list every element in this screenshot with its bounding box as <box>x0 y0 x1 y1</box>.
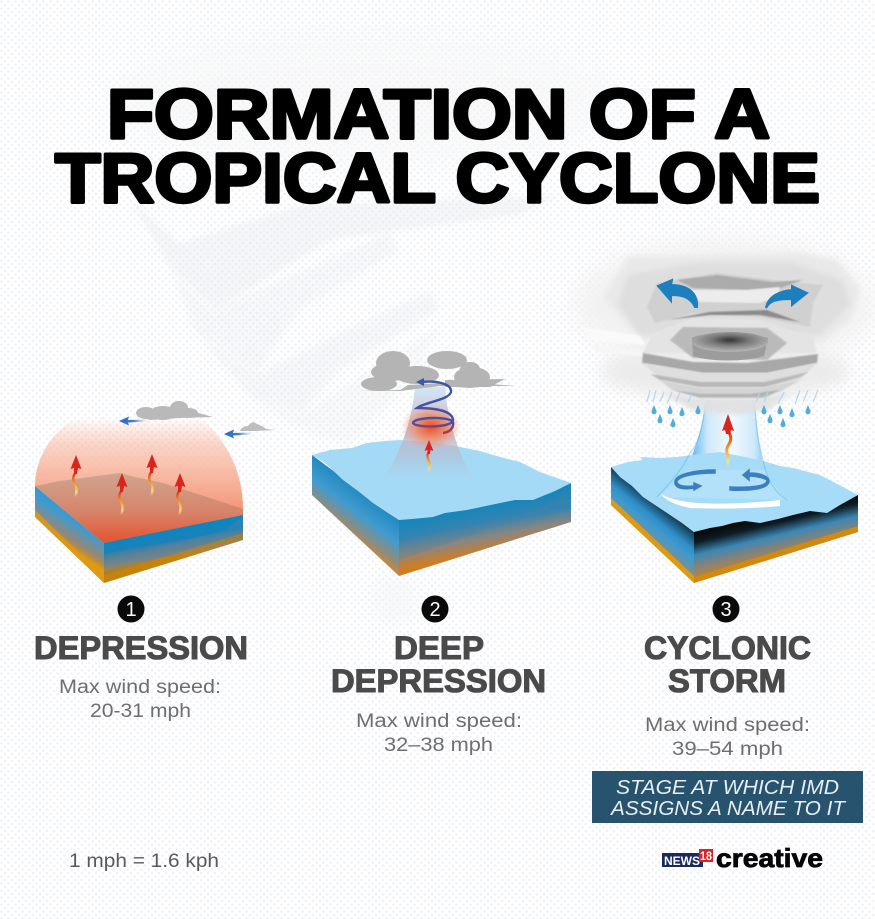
logo: News18 Creative: 18 <box>700 851 713 863</box>
wind speed: depression: Max wind speed: <box>59 677 221 698</box>
white swirl <box>661 494 780 509</box>
stage 2 text <box>331 596 546 756</box>
stage 3 illustration: cyclonic storm <box>575 240 875 583</box>
number badge 2 <box>422 596 448 622</box>
rising air arrow <box>424 440 434 472</box>
ocean block 1 <box>35 486 243 583</box>
heading: cyclonic storm: CYCLONIC <box>644 630 811 666</box>
number badge 1 <box>118 596 144 622</box>
wind speed: depression: 20-31 mph <box>90 701 191 722</box>
heading: deep depression <box>331 630 546 699</box>
wind speed: depression <box>59 677 221 722</box>
stage 3 text <box>644 596 811 760</box>
number badge 2: 2 <box>429 599 441 621</box>
wind speed: cyclonic storm <box>645 715 810 760</box>
cloud large <box>136 401 213 420</box>
stage 1 illustration: depression <box>35 401 275 583</box>
heading: cyclonic storm <box>644 630 811 699</box>
wind speed: deep depression: Max wind speed: <box>356 711 522 732</box>
swirl arrow right <box>730 470 769 490</box>
funnel upper <box>686 400 764 470</box>
background ghost tornado <box>105 30 625 626</box>
sea surface <box>312 440 571 520</box>
callout: naming stage <box>592 771 863 823</box>
title: FORMATION OF A <box>107 75 770 153</box>
spiral arrow head <box>416 378 424 386</box>
sea surface <box>35 473 243 543</box>
number badge 3 <box>712 596 740 622</box>
rising air arrow <box>722 414 734 468</box>
cloud small <box>240 422 275 431</box>
wind speed: deep depression <box>356 711 522 756</box>
spiral arrow <box>413 382 453 433</box>
title: TROPICAL CYCLONE <box>55 139 820 217</box>
outflow arrow left <box>658 280 697 307</box>
rain <box>647 390 818 427</box>
callout: naming stage: STAGE AT WHICH IMD <box>616 776 839 799</box>
callout: naming stage: ASSIGNS A NAME TO IT <box>609 797 846 820</box>
heated air dome <box>35 418 243 543</box>
number badge 3: 3 <box>720 599 732 621</box>
logo: News18 Creative: NEWS <box>664 854 700 868</box>
heading: deep depression: DEPRESSION <box>331 663 546 699</box>
title <box>55 75 820 217</box>
warm core glow <box>401 404 461 450</box>
ocean block 3 <box>611 467 858 583</box>
unit conversion note: 1 mph = 1.6 kph <box>69 851 219 872</box>
stage 1 text <box>34 596 248 722</box>
wind arrow left <box>119 416 148 426</box>
storm cloud <box>575 240 875 415</box>
heading: deep depression: DEEP <box>394 630 484 666</box>
cloud <box>359 351 516 391</box>
wind speed: cyclonic storm: 39–54 mph <box>672 739 783 760</box>
logo: News18 Creative: creative <box>716 843 823 873</box>
heading: depression: DEPRESSION <box>34 630 248 666</box>
funnel lower <box>657 470 787 500</box>
heading: cyclonic storm: STORM <box>668 663 786 699</box>
wind arrow right <box>224 430 253 438</box>
stage 2 illustration: deep depression <box>312 351 571 576</box>
swirl arrow left <box>675 470 715 490</box>
outflow arrow right <box>766 286 807 308</box>
rising air arrows <box>70 454 186 515</box>
number badge 1: 1 <box>125 599 137 621</box>
sea surface <box>611 452 858 532</box>
wind speed: cyclonic storm: Max wind speed: <box>645 715 810 736</box>
funnel <box>382 387 475 482</box>
logo: News18 Creative <box>662 843 823 873</box>
wind speed: deep depression: 32–38 mph <box>384 735 493 756</box>
funnel edges <box>657 405 787 500</box>
ocean block 2 <box>312 455 571 576</box>
